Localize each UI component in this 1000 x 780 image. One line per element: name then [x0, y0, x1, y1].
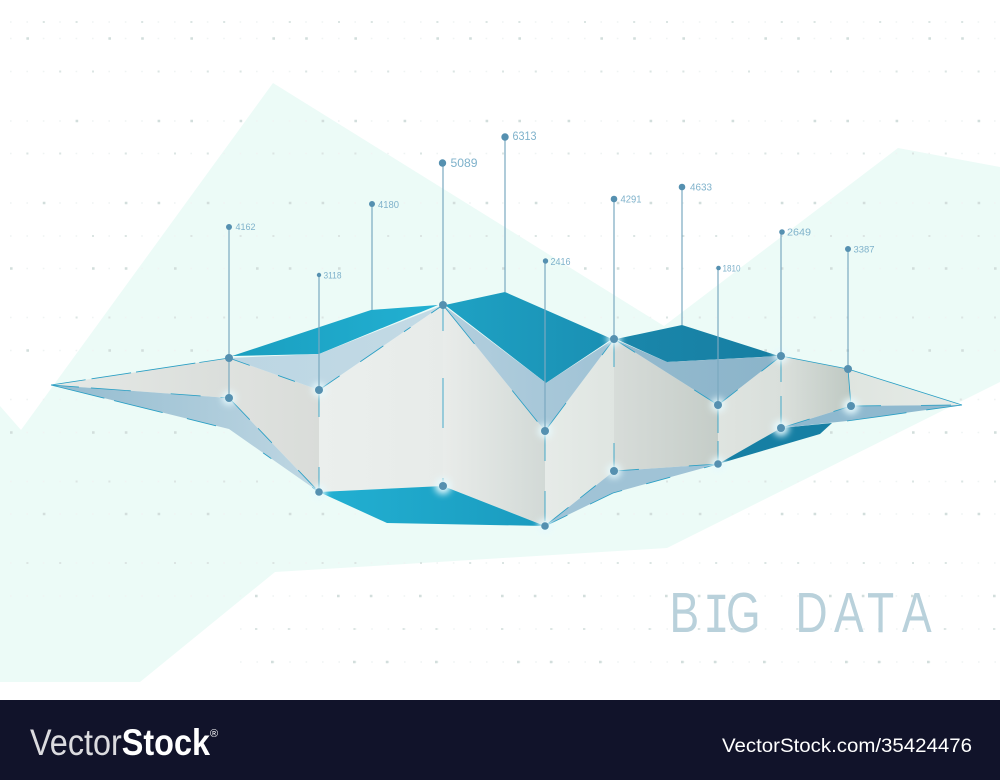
- chart: 3D big data surface: [51, 137, 962, 533]
- mint background shape: [0, 83, 1000, 682]
- label 6313: 6313: [512, 129, 537, 143]
- top faces light: [229, 305, 781, 431]
- label 6313: [501, 129, 537, 143]
- label 5089: 5089: [450, 156, 478, 170]
- label 3387: [845, 244, 874, 254]
- label 2649: [779, 228, 811, 238]
- footer id: VectorStock.com/35424476: [722, 736, 972, 757]
- label 3118: [317, 270, 342, 280]
- dashed edges: [51, 305, 962, 526]
- footer bar: [0, 700, 1000, 780]
- registered mark: ®: [210, 728, 218, 740]
- wall faces: [51, 305, 962, 526]
- top faces dark: [232, 292, 779, 383]
- surface nodes: [225, 301, 855, 530]
- bottom faces: [51, 385, 962, 526]
- label 5089: [439, 156, 478, 170]
- label 1810: [716, 264, 740, 274]
- label 4162: 4162: [236, 222, 256, 232]
- label 2416: [543, 257, 571, 268]
- label 4291: 4291: [620, 194, 642, 206]
- label 2649: 2649: [787, 228, 811, 238]
- data labels: [226, 129, 874, 280]
- label 4180: [369, 200, 399, 211]
- label 4162: [226, 222, 256, 232]
- footer logo: VectorStock: [30, 722, 210, 763]
- label 4633: [679, 182, 712, 194]
- node glows: [222, 332, 859, 533]
- label 4180: 4180: [378, 200, 399, 211]
- label 4633: 4633: [690, 182, 712, 194]
- label 2416: 2416: [550, 257, 571, 268]
- label 3118: 3118: [324, 270, 342, 280]
- stems: [229, 137, 848, 431]
- label 3387: 3387: [854, 244, 874, 254]
- title: BIG DATA: BIG DATA: [669, 581, 932, 650]
- label 4291: [611, 194, 642, 206]
- label 1810: 1810: [722, 264, 740, 274]
